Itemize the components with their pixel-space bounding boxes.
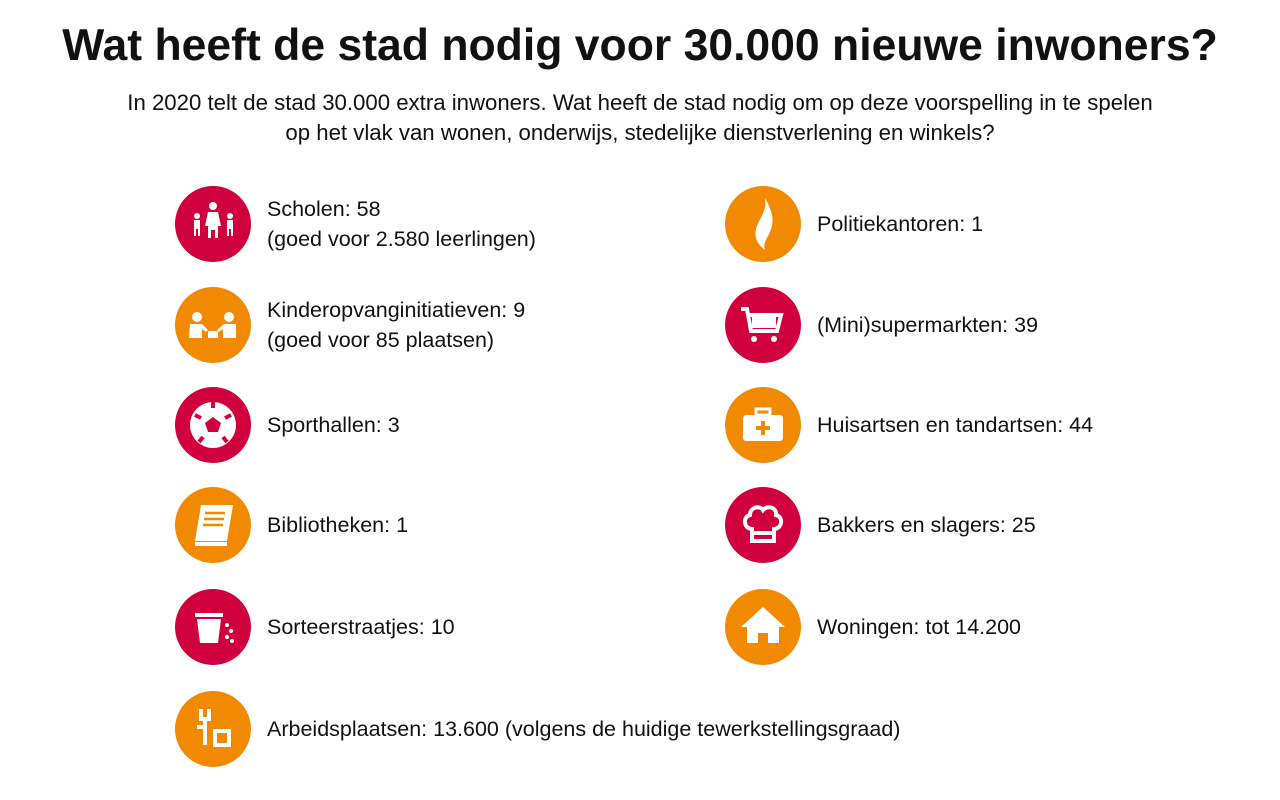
- text: Kinderopvanginitiatieven: 9: [267, 298, 525, 322]
- text: Bibliotheken: 1: [267, 513, 408, 537]
- subtitle: In 2020 telt de stad 30.000 extra inwoners. Wat heeft de stad nodig om op deze voorspelling in te spelen: [127, 90, 1153, 115]
- title: Wat heeft de stad nodig voor 30.000 nieuwe inwoners?: [62, 21, 1218, 70]
- icon: chef hat: [725, 487, 801, 563]
- text: Sporthallen: 3: [267, 413, 400, 437]
- text: [267, 197, 536, 251]
- text: Woningen: tot 14.200: [817, 615, 1021, 639]
- text: [267, 298, 525, 352]
- item: kinderopvang: [175, 287, 525, 363]
- icon: bin: [175, 589, 251, 665]
- icon: cart: [725, 287, 801, 363]
- item: scholen: [175, 186, 536, 262]
- text: (goed voor 2.580 leerlingen): [267, 227, 536, 251]
- subtitle: op het vlak van wonen, onderwijs, stedelijke dienstverlening en winkels?: [285, 120, 995, 145]
- item: bibliotheken: [175, 487, 408, 563]
- text: Bakkers en slagers: 25: [817, 513, 1036, 537]
- item: woningen: [725, 589, 1021, 665]
- icon: book: [175, 487, 251, 563]
- text: (Mini)supermarkten: 39: [817, 313, 1038, 337]
- subtitle: [127, 90, 1153, 145]
- icon: children playing: [175, 287, 251, 363]
- text: Huisartsen en tandartsen: 44: [817, 413, 1093, 437]
- item: sporthallen: [175, 387, 400, 463]
- icon: family: [175, 186, 251, 262]
- text: Arbeidsplaatsen: 13.600 (volgens de huidige tewerkstellingsgraad): [267, 717, 900, 741]
- icon: medical kit: [725, 387, 801, 463]
- icon: house: [725, 589, 801, 665]
- item: huisartsen: [725, 387, 1093, 463]
- item: arbeidsplaatsen: [175, 691, 900, 767]
- text: Politiekantoren: 1: [817, 212, 983, 236]
- text: Scholen: 58: [267, 197, 381, 221]
- item: supermarkten: [725, 287, 1038, 363]
- item: bakkers: [725, 487, 1036, 563]
- item: sorteerstraatjes: [175, 589, 455, 665]
- item: politie: [725, 186, 983, 262]
- text: Sorteerstraatjes: 10: [267, 615, 455, 639]
- text: (goed voor 85 plaatsen): [267, 328, 494, 352]
- icon: flame: [725, 186, 801, 262]
- icon: football: [175, 387, 251, 463]
- icon: worker tools: [175, 691, 251, 767]
